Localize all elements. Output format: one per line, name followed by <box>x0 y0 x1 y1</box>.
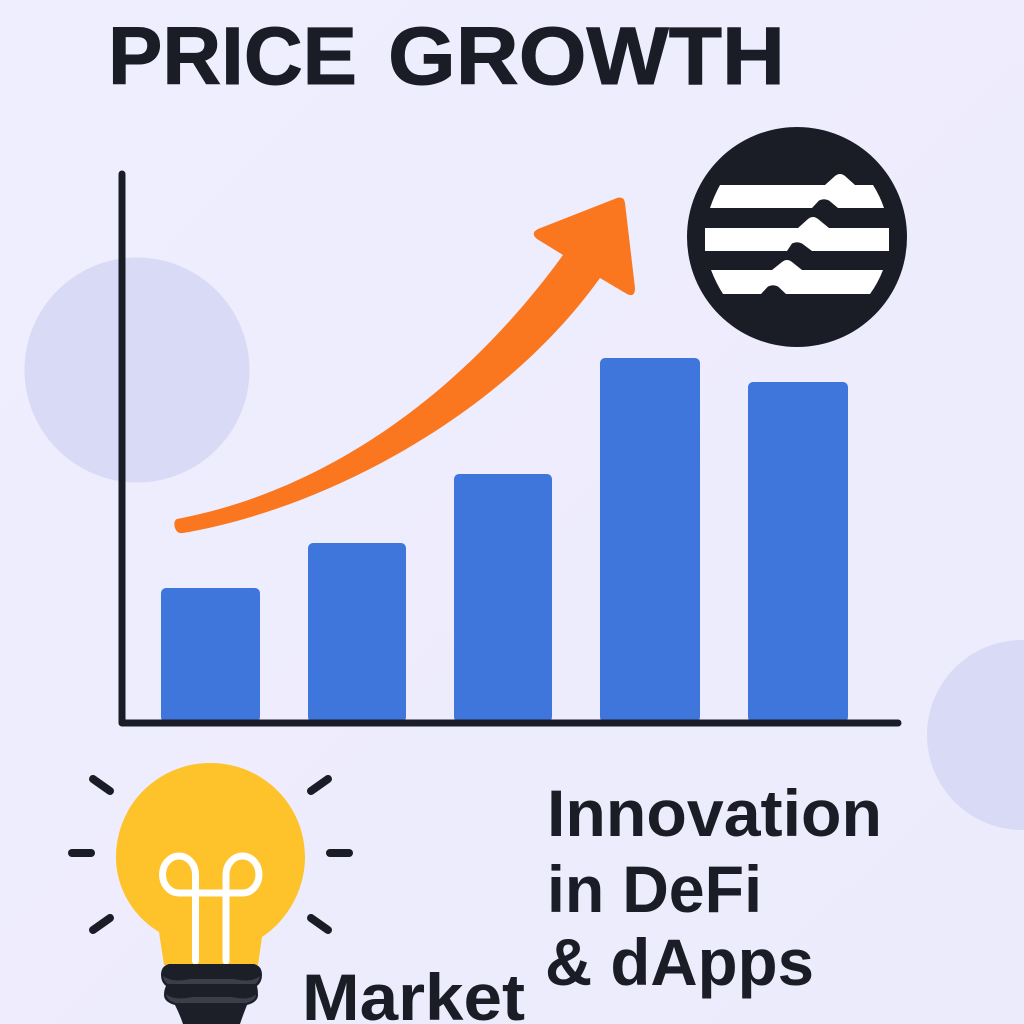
title: PRICE <box>108 11 357 102</box>
label: Innovation in DeFi and dApps: & dApps <box>545 925 814 999</box>
title: GROWTH <box>388 11 785 102</box>
light rays <box>72 779 349 930</box>
decorative circle: right <box>927 640 1024 830</box>
bulb base <box>161 964 262 1024</box>
decorative circle: left <box>24 258 250 482</box>
bar chart <box>122 174 898 723</box>
bar 1 <box>161 588 260 722</box>
logo band 3 <box>711 260 883 294</box>
logo band 1 <box>710 174 884 208</box>
bulb glass <box>116 763 305 965</box>
arrow: upward growth trend <box>174 198 635 533</box>
logo band 2 <box>705 217 889 251</box>
bar 4 <box>600 358 700 722</box>
title <box>108 11 785 102</box>
icon: light bulb <box>72 763 349 1024</box>
bar 2 <box>308 543 406 722</box>
chart axes <box>122 174 898 723</box>
bar 3 <box>454 474 552 722</box>
label: Innovation in DeFi and dApps: Innovation <box>547 776 882 850</box>
label: Innovation in DeFi and dApps: in DeFi <box>547 852 762 926</box>
base highlights <box>163 976 260 1003</box>
label: Innovation in DeFi and dApps <box>545 776 882 999</box>
bar 5 <box>748 382 848 722</box>
filament <box>162 856 259 961</box>
icon: Aptos logo <box>687 127 907 347</box>
